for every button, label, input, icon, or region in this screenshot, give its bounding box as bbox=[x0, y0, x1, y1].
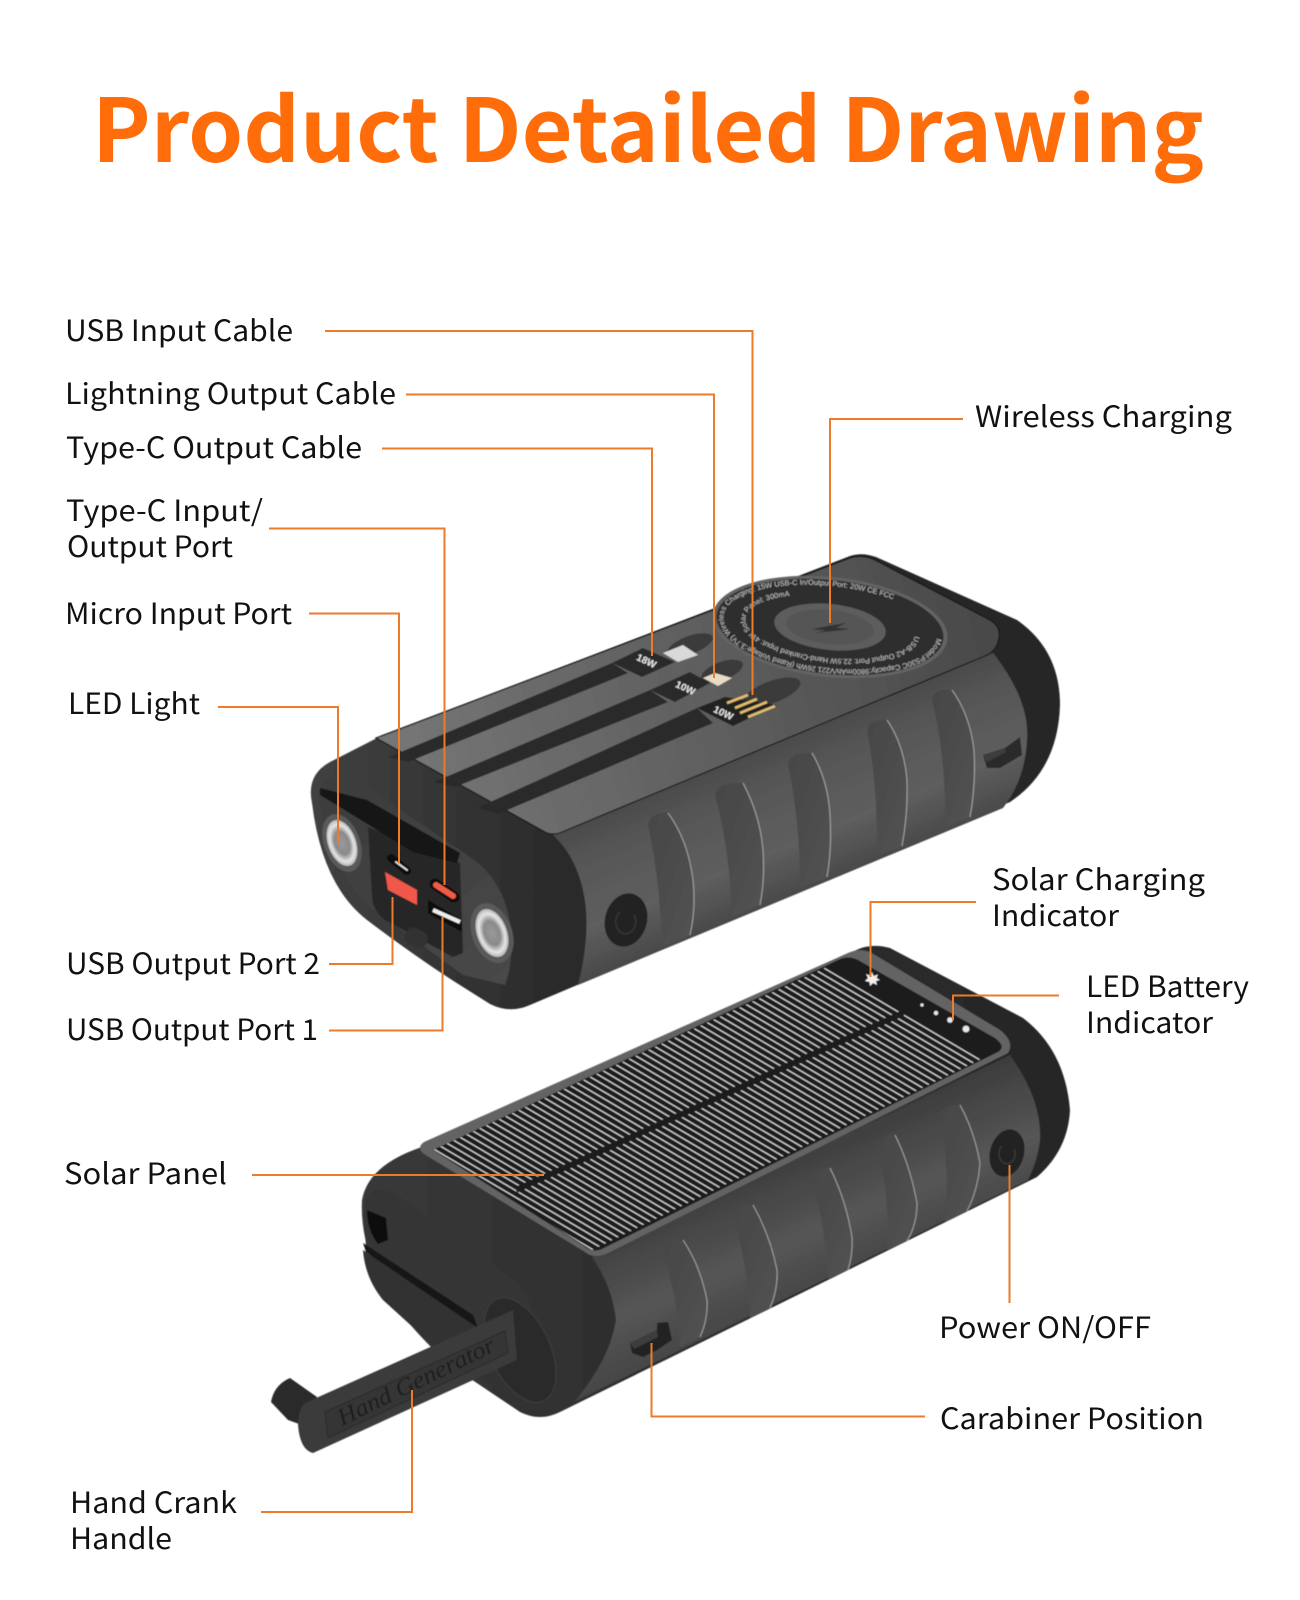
carabiner slot bbox=[983, 737, 1022, 768]
crank arm bbox=[271, 1310, 517, 1453]
crank knob bbox=[271, 1378, 317, 1425]
body silhouette bbox=[362, 946, 1070, 1417]
connector: USB-C silver bbox=[663, 645, 698, 662]
label: Micro Input Port: Micro Input Port bbox=[65, 591, 292, 633]
cable tabs bbox=[612, 648, 777, 726]
connector: USB gold contacts bbox=[727, 695, 775, 717]
label: Power ON/OFF: Power ON/OFF bbox=[939, 1305, 1151, 1347]
leader: Solar Panel bbox=[252, 1174, 544, 1176]
top face bbox=[376, 556, 999, 834]
label: Hand Crank Handle: Handle bbox=[70, 1516, 172, 1558]
crank engraved text: Hand Generator bbox=[332, 1332, 500, 1432]
Type-C port red bbox=[435, 884, 454, 897]
label: Type-C Input/Output Port: Output Port bbox=[67, 524, 233, 566]
cable tabs: 10W bbox=[673, 679, 697, 698]
cable recesses bbox=[664, 628, 804, 713]
label: LED Battery Indicator bbox=[1086, 964, 1249, 1042]
leader: Carabiner Position bbox=[652, 1343, 925, 1416]
crank slot bbox=[363, 1243, 478, 1328]
label: USB Output Port 1: USB Output Port 1 bbox=[66, 1007, 318, 1049]
LED battery indicator dots bbox=[920, 1003, 969, 1032]
title: Product Detailed Drawing bbox=[92, 61, 1204, 188]
leader: LED Battery Indicator bbox=[953, 996, 1059, 1020]
leader: Type-C Input/Output Port bbox=[269, 528, 444, 885]
front face bbox=[318, 775, 511, 985]
power button bbox=[984, 1125, 1030, 1181]
solar charging indicator bbox=[865, 972, 880, 986]
label: LED Light: LED Light bbox=[68, 681, 200, 723]
label: USB Input Cable: USB Input Cable bbox=[65, 308, 293, 350]
label: Carabiner Position: Carabiner Position bbox=[940, 1396, 1204, 1438]
product: power bank top view bbox=[310, 553, 1061, 1010]
leader: Wireless Charging bbox=[830, 419, 963, 623]
leader: Power ON/OFF bbox=[1008, 1165, 1010, 1303]
label: Hand Crank Handle bbox=[70, 1480, 237, 1558]
LED light right bbox=[463, 897, 521, 969]
label: Solar Charging Indicator bbox=[992, 857, 1205, 935]
end face bbox=[364, 1190, 531, 1325]
connector: lightning bbox=[703, 673, 732, 686]
label: Solar Charging Indicator: Solar Charging bbox=[992, 857, 1205, 899]
label: Solar Panel: Solar Panel bbox=[64, 1151, 227, 1193]
label: LED Battery Indicator: Indicator bbox=[1086, 1000, 1214, 1042]
label: Solar Charging Indicator: Indicator bbox=[992, 893, 1120, 935]
body silhouette bbox=[311, 554, 1060, 1009]
power button bbox=[599, 888, 653, 952]
side face bbox=[553, 653, 1027, 985]
leader: Type-C Output Cable bbox=[382, 448, 652, 656]
label: Type-C Output Cable: Type-C Output Cable bbox=[66, 425, 362, 467]
label: Wireless Charging: Wireless Charging bbox=[975, 394, 1232, 436]
wireless charging disk: Model:PS30C Capacity:9800mAh/V221 26Wh (Rated Voltage:3.7V) Wireless Charging: 15W USB-C In/Output Port: 20W CE FCC bbox=[718, 578, 942, 676]
leader: Micro Input Port bbox=[309, 614, 399, 863]
wireless charging disk: USB-A2 Output Port: 22.5W Hand-Cranked Input: 4W Solar Panel: 300mA bbox=[740, 590, 920, 665]
carabiner hole bbox=[367, 1210, 388, 1244]
cable channels bbox=[389, 663, 713, 814]
side ribs bbox=[648, 690, 974, 947]
label: Lightning Output Cable: Lightning Output Cable bbox=[65, 371, 396, 413]
solar panel surface bbox=[433, 958, 1002, 1251]
cable tabs: 10W bbox=[711, 704, 735, 723]
port cutout panel bbox=[368, 827, 463, 957]
USB port 2 red bbox=[385, 872, 417, 905]
LED light left bbox=[315, 809, 369, 877]
leader: Solar Charging Indicator bbox=[870, 902, 976, 977]
leader: USB Output Port 1 bbox=[329, 917, 442, 1030]
label: USB Output Port 2: USB Output Port 2 bbox=[66, 941, 320, 983]
label: LED Battery Indicator: LED Battery bbox=[1086, 964, 1249, 1006]
crank disc bbox=[469, 1287, 571, 1413]
cable tabs: 18W bbox=[634, 652, 658, 671]
leader: USB Input Cable bbox=[325, 331, 752, 695]
leader: Hand Crank Handle bbox=[261, 1390, 412, 1512]
product: power bank solar view bbox=[271, 946, 1070, 1453]
solar cells hatch bbox=[433, 967, 983, 1250]
side ribs bbox=[663, 1105, 980, 1347]
label: Type-C Input/Output Port bbox=[66, 488, 263, 566]
lower shell bbox=[363, 1250, 495, 1385]
solar panel frame bbox=[420, 950, 1010, 1256]
solar cell divider bbox=[516, 1013, 903, 1190]
carabiner slot bbox=[630, 1322, 672, 1357]
front latch bbox=[402, 925, 430, 950]
leader: Lightning Output Cable bbox=[406, 394, 714, 678]
port flap bbox=[320, 788, 460, 863]
micro port bbox=[391, 858, 407, 871]
leader: USB Output Port 2 bbox=[329, 897, 392, 964]
label: Type-C Input/Output Port: Type-C Input/ bbox=[66, 488, 263, 530]
label: Hand Crank Handle: Hand Crank bbox=[70, 1480, 237, 1522]
leader: LED Light bbox=[218, 707, 338, 843]
USB port 1 white bbox=[428, 900, 462, 932]
side face bbox=[574, 1055, 1040, 1402]
